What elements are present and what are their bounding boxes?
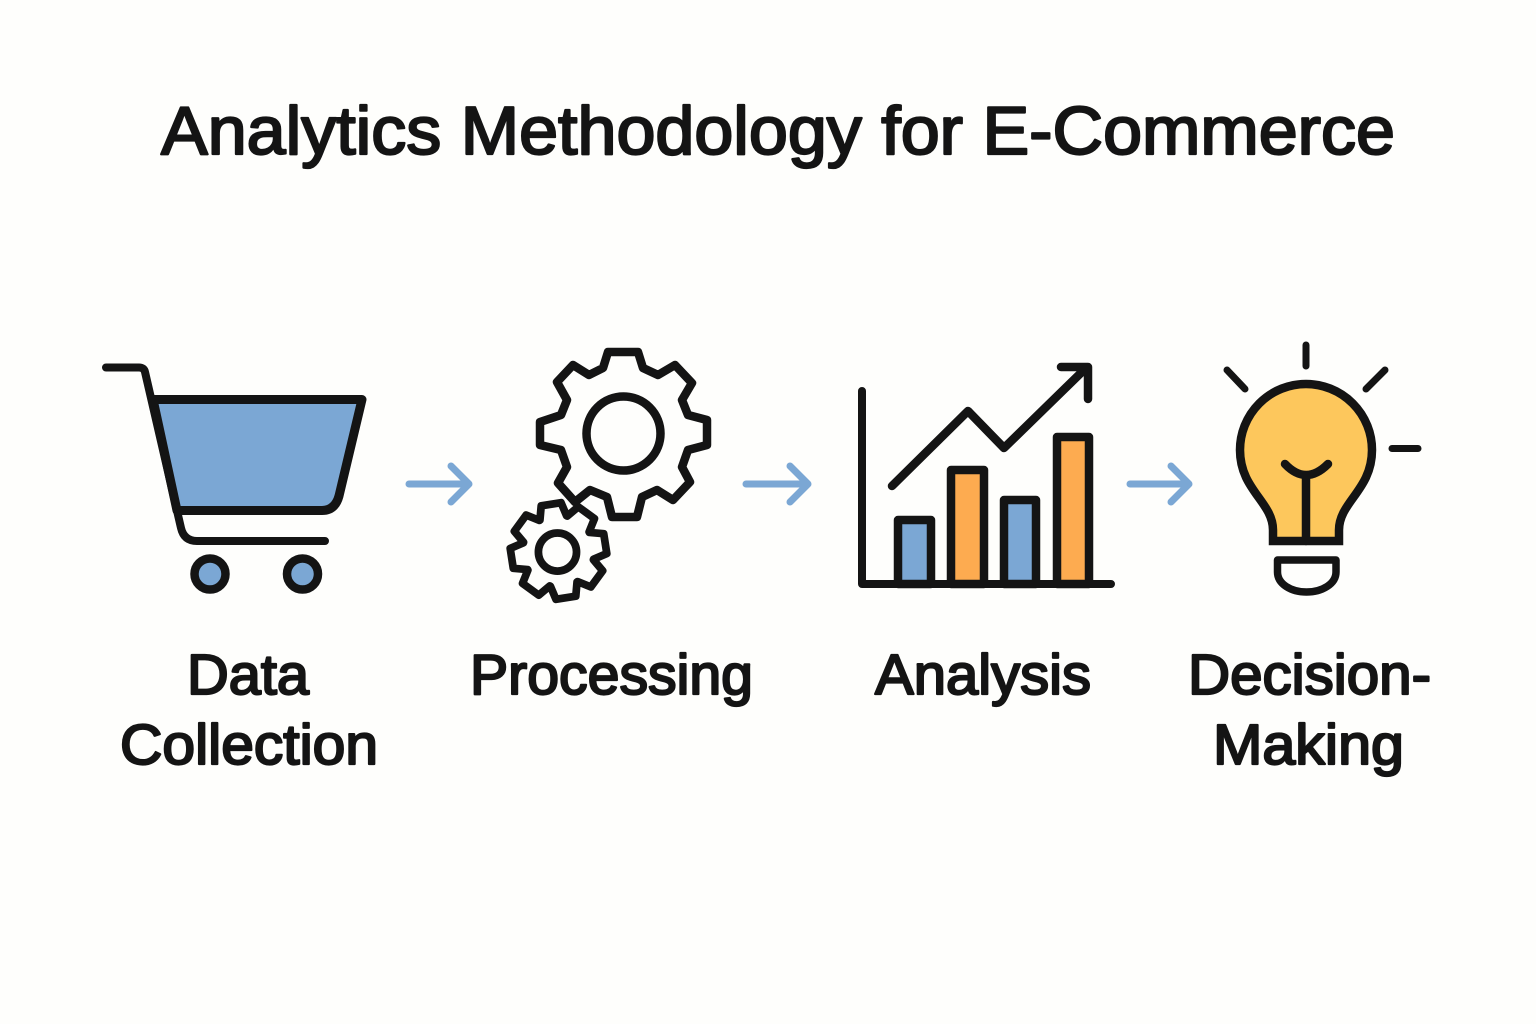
label: analysis: Analysis — [875, 643, 1091, 707]
icon: light bulb — [1227, 345, 1418, 592]
arrow: analysis to decision-making — [1130, 466, 1189, 502]
label: data collection: Collection — [120, 713, 378, 777]
arrow: data collection to processing — [409, 466, 469, 502]
label: decision-making: Making — [1213, 713, 1404, 777]
label: data collection: Data — [187, 643, 309, 707]
small gear — [510, 503, 607, 599]
icon: gears — [510, 352, 707, 599]
label: decision-making — [1188, 643, 1431, 777]
label: processing: Processing — [470, 643, 753, 707]
label: decision-making: Decision- — [1188, 643, 1431, 707]
arrow: processing to analysis — [746, 466, 808, 502]
label: data collection — [120, 643, 378, 777]
icon: bar chart with trend arrow — [862, 367, 1111, 584]
icon: shopping cart — [106, 368, 362, 590]
large gear — [540, 352, 707, 517]
title: Analytics Methodology for E-Commerce — [161, 93, 1395, 169]
